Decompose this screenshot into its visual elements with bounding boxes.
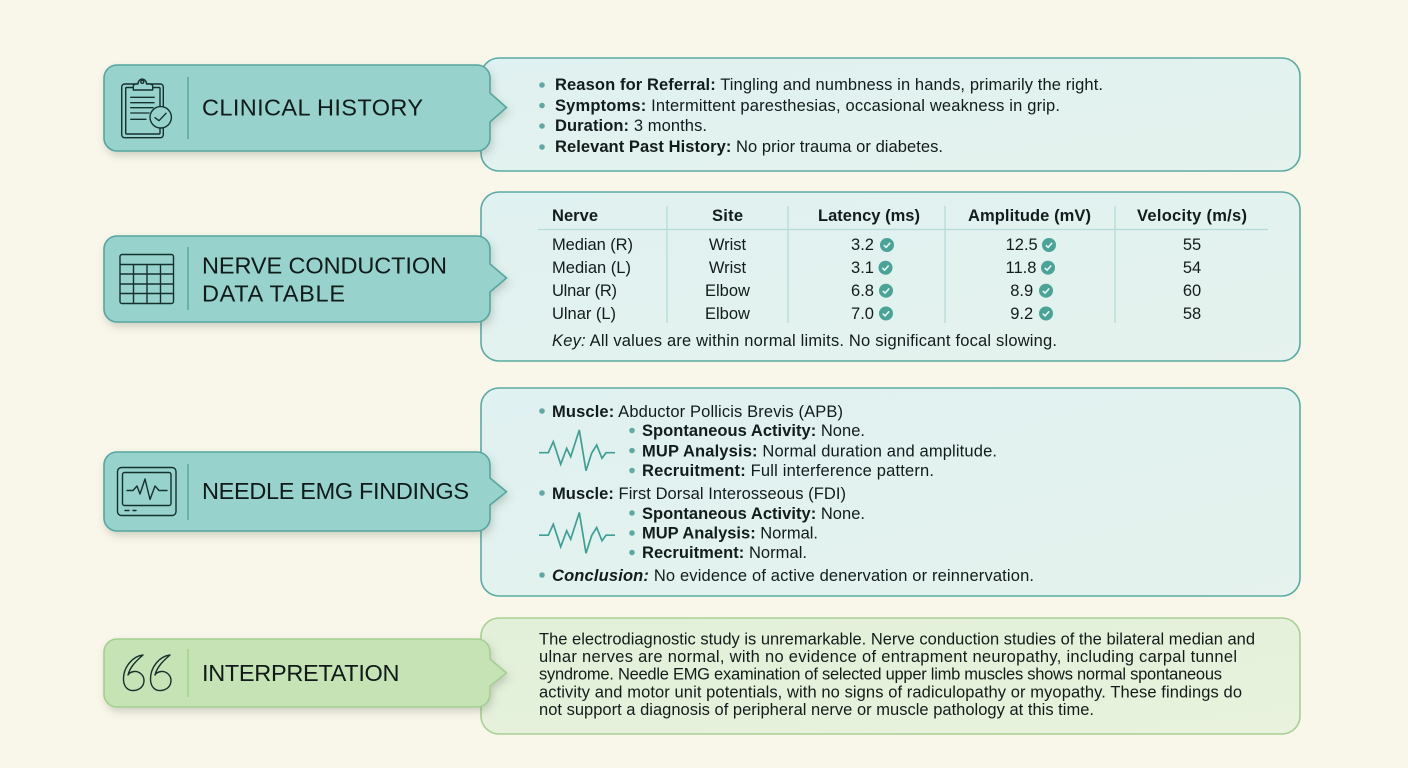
muscle block: APB: Spontaneous Activity: None. [642,422,865,440]
heading: needle EMG findings: NEEDLE EMG FINDINGS [202,478,469,504]
table header: Velocity (m/s) [1137,207,1247,225]
panel: needle EMG findings [481,388,1300,596]
interpretation paragraph: syndrome. Needle EMG examination of selected upper limb muscles shows normal spontaneous [539,666,1222,684]
table row: median left: Wrist [709,259,747,277]
muscle block: FDI: MUP Analysis: Normal. [642,524,818,542]
heading: nerve conduction data table: DATA TABLE [202,280,345,306]
icon: EMG monitor [118,468,176,516]
table row: median left: 54 [1183,259,1201,277]
table row: ulnar left: Elbow [705,305,750,323]
table row: median left: Median (L) [552,259,631,277]
bullet list: clinical history: Duration: 3 months. [555,117,707,135]
table row: median right: 3.2 [851,236,874,254]
table row: ulnar right: 8.9 [1010,282,1033,300]
panel: nerve conduction data table [481,192,1300,361]
heading: interpretation: INTERPRETATION [202,660,400,686]
table header [552,207,1247,225]
heading: clinical history: CLINICAL HISTORY [202,94,423,120]
muscle block: FDI: Spontaneous Activity: None. [642,505,865,523]
table row: median right: 12.5 [1006,236,1038,254]
muscle block: APB [539,403,997,480]
table row: median right [552,236,1201,254]
bullet list: clinical history [539,76,1103,156]
bullet list: clinical history: Relevant Past History: No prior trauma or diabetes. [555,138,943,156]
panel: interpretation [481,618,1300,734]
interpretation paragraph: activity and motor unit potentials, with no signs of radiculopathy or myopathy. These findings do [539,684,1242,702]
interpretation paragraph [539,630,1255,719]
waveform: APB [539,430,615,471]
table header: Latency (ms) [818,207,920,225]
tab: nerve conduction data table [104,236,506,322]
table row: ulnar right [552,282,1201,300]
table row: ulnar right: 6.8 [851,282,874,300]
waveform: FDI [539,512,615,553]
table row: median left [552,259,1201,277]
conclusion: Conclusion: No evidence of active denervation or reinnervation. [552,567,1034,585]
interpretation paragraph: not support a diagnosis of peripheral nerve or muscle pathology at this time. [539,701,1094,719]
interpretation paragraph: The electrodiagnostic study is unremarkable. Nerve conduction studies of the bilateral median and [539,630,1255,648]
tab: interpretation [104,639,506,707]
bullet list: clinical history: Reason for Referral: Tingling and numbness in hands, primarily the right. [555,76,1103,94]
icon: clipboard with check [122,79,171,138]
table row: ulnar left: 7.0 [851,305,874,323]
muscle block: APB: Recruitment: Full interference pattern. [642,462,934,480]
icon: quotation marks [123,655,171,691]
muscle block: APB: MUP Analysis: Normal duration and amplitude. [642,442,997,460]
table header: Nerve [552,207,598,225]
muscle block: FDI: Muscle: First Dorsal Interosseous (FDI) [552,485,846,503]
bullet list: clinical history: Symptoms: Intermittent paresthesias, occasional weakness in grip. [555,97,1060,115]
table row: median right: 55 [1183,236,1201,254]
table header: Amplitude (mV) [968,207,1091,225]
tab: needle EMG findings [104,452,506,531]
table row: ulnar left: 58 [1183,305,1201,323]
heading: nerve conduction data table: NERVE CONDUCTION [202,252,447,278]
muscle block: FDI: Recruitment: Normal. [642,544,807,562]
icon: table grid [120,254,174,304]
table row: ulnar left [552,305,1201,323]
data table [538,206,1268,323]
table row: ulnar right: Ulnar (R) [552,282,617,300]
muscle block: FDI [539,485,865,562]
panel: clinical history [481,58,1300,171]
muscle block: APB: Muscle: Abductor Pollicis Brevis (APB) [552,403,843,421]
table key: Key: All values are within normal limits. No significant focal slowing. [552,332,1057,350]
table row: ulnar left: Ulnar (L) [552,305,616,323]
interpretation paragraph: ulnar nerves are normal, with no evidence of entrapment neuropathy, including carpal tunnel [539,648,1237,666]
table header: Site [712,207,743,225]
table row: ulnar left: 9.2 [1010,305,1033,323]
table row: median right: Median (R) [552,236,633,254]
table row: median left: 3.1 [851,259,874,277]
table row: median right: Wrist [709,236,747,254]
table row: median left: 11.8 [1006,259,1036,277]
tab: clinical history [104,65,506,151]
table row: ulnar right: Elbow [705,282,750,300]
table row: ulnar right: 60 [1183,282,1201,300]
